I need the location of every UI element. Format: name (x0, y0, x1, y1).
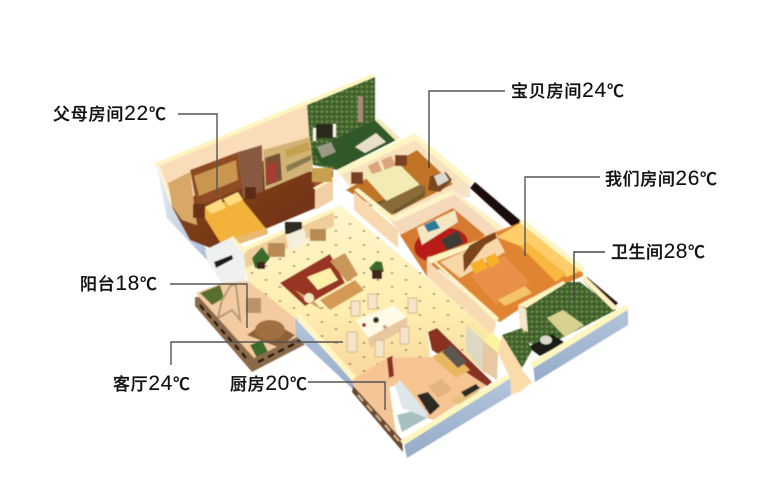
parents room back wall (155, 74, 375, 215)
corridor (498, 328, 532, 395)
label: kitchen: 厨房20℃ (230, 372, 307, 395)
lower left outer wall (295, 314, 356, 392)
kitchen pillar and glass door (466, 322, 510, 380)
floor plan illustration (155, 74, 629, 458)
study room (390, 190, 505, 278)
left outer wall (157, 166, 211, 260)
balcony railing (195, 297, 304, 372)
leader: baby room (429, 91, 505, 168)
wardrobe partition wall (312, 168, 335, 210)
label: my room: 我们房间26℃ (605, 167, 717, 190)
green tiled ensuite bathroom (307, 77, 400, 170)
label: baby room: 宝贝房间24℃ (511, 79, 624, 102)
my room (427, 219, 585, 335)
leader: parents room (178, 114, 217, 195)
front outer walls (400, 305, 629, 458)
balcony (196, 281, 304, 362)
baby room (337, 133, 472, 248)
parents room wood floor and furniture (168, 137, 333, 250)
dining table and chairs (347, 294, 417, 357)
label: living room: 客厅24℃ (113, 372, 190, 395)
living and dining floor (243, 205, 497, 380)
small service room (205, 236, 247, 283)
label: parents room: 父母房间22℃ (53, 102, 166, 125)
leader: kitchen (308, 382, 385, 410)
laundry balcony (352, 372, 427, 452)
wall behind the living room with TV (242, 208, 336, 269)
leader: my room (525, 177, 600, 256)
kitchen (352, 328, 492, 420)
leader: balcony (170, 284, 247, 328)
living room sofa set (280, 253, 384, 310)
black outer railing (470, 182, 618, 310)
label: balcony: 阳台18℃ (80, 272, 157, 295)
leader: bathroom (574, 252, 605, 300)
label: bathroom: 卫生间28℃ (611, 240, 705, 263)
main bathroom (502, 276, 618, 356)
bed (200, 197, 267, 242)
leader: living room (171, 342, 343, 365)
